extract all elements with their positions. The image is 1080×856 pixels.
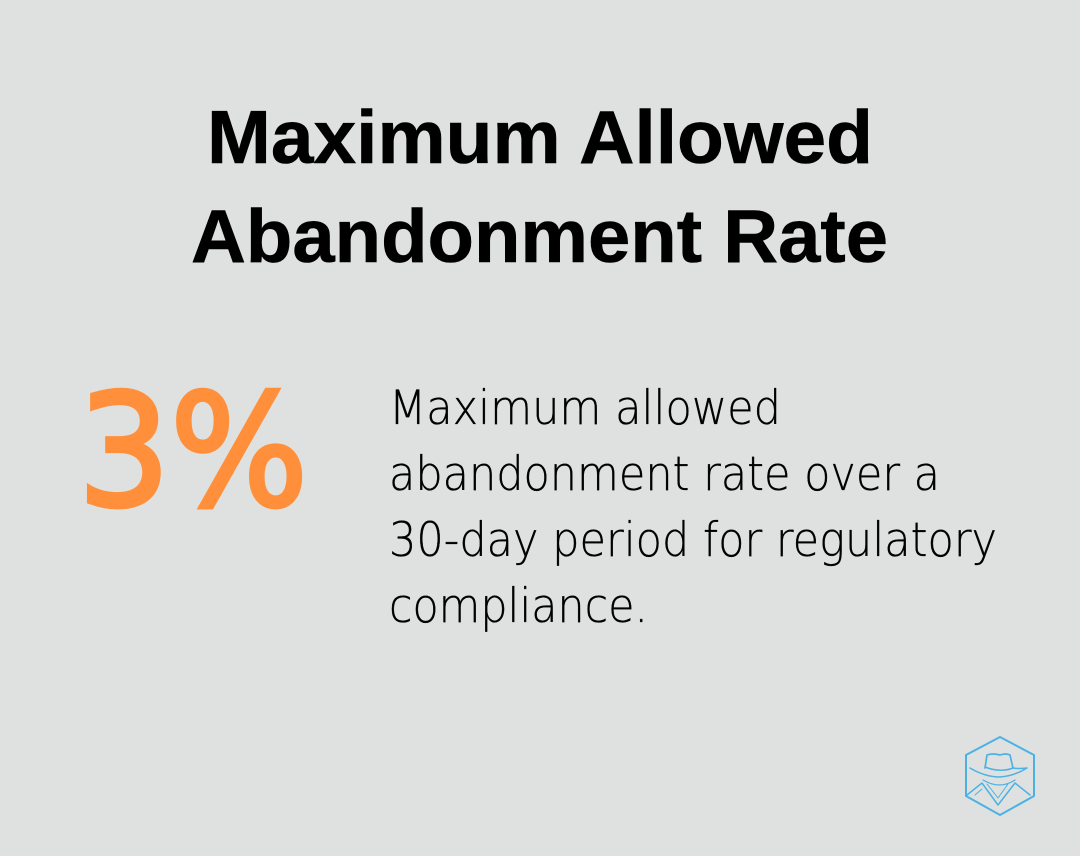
big statistic: 3%: 3% [78, 361, 308, 542]
description text: abandonment rate over a [389, 447, 940, 502]
description text: compliance. [389, 579, 648, 634]
title [191, 95, 888, 278]
title: Maximum Allowed [207, 95, 873, 179]
description text [389, 381, 997, 634]
description text: 30-day period for regulatory [389, 513, 997, 568]
description text: Maximum allowed [389, 381, 781, 436]
icon: hexagon logo with hat [966, 737, 1034, 815]
title: Abandonment Rate [191, 194, 888, 278]
